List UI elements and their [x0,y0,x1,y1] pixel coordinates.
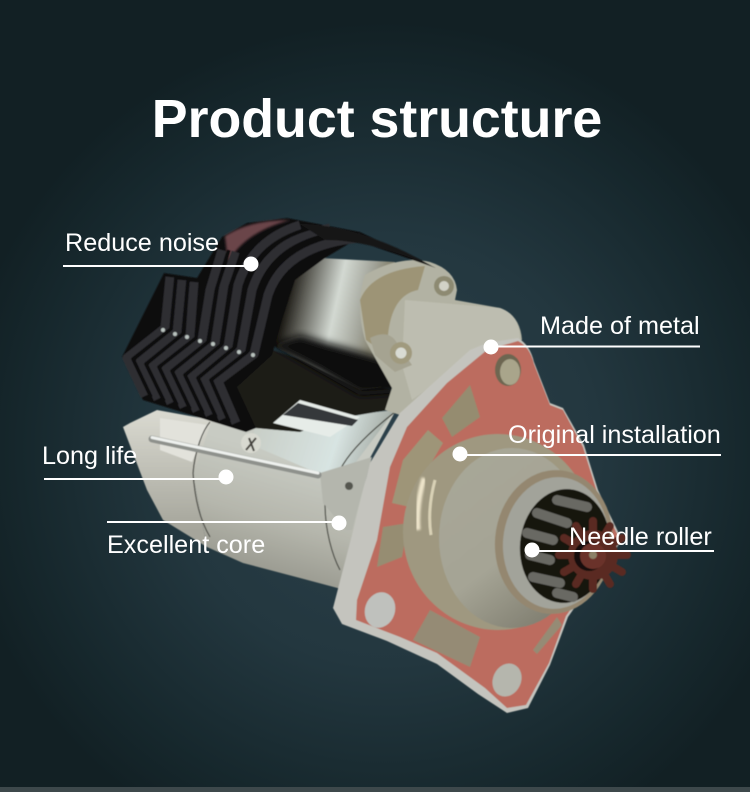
pinion housing and gears [489,465,627,619]
bottom edge strip [0,787,750,792]
callout: Original installation: Original installation [508,421,721,449]
callout: Long life [42,442,234,484]
red painted flange face [356,341,620,708]
solenoid cylinder [272,258,400,395]
callout: Made of metal [484,312,700,354]
tie rod and motor bracket [152,433,372,530]
title: Product structure [152,89,602,149]
callout: Reduce noise [63,229,258,272]
mounting flange silver rim [333,338,622,713]
callout: Long life: Long life [42,442,137,470]
solenoid housing casting [360,260,522,415]
black ribbed cooling cover [122,218,436,432]
callout: Reduce noise: Reduce noise [65,229,219,257]
callout: Excellent core [107,516,346,559]
callout: Made of metal: Made of metal [540,312,700,340]
callout: Original installation [452,421,721,462]
lower motor barrel [123,410,395,590]
callout: Needle roller [524,523,714,558]
callout: Excellent core: Excellent core [107,531,265,559]
starter motor illustration [122,218,627,713]
callout: Needle roller: Needle roller [569,523,712,551]
drive nose cone [403,434,593,630]
dark motor upper section with barcode label [237,350,395,437]
